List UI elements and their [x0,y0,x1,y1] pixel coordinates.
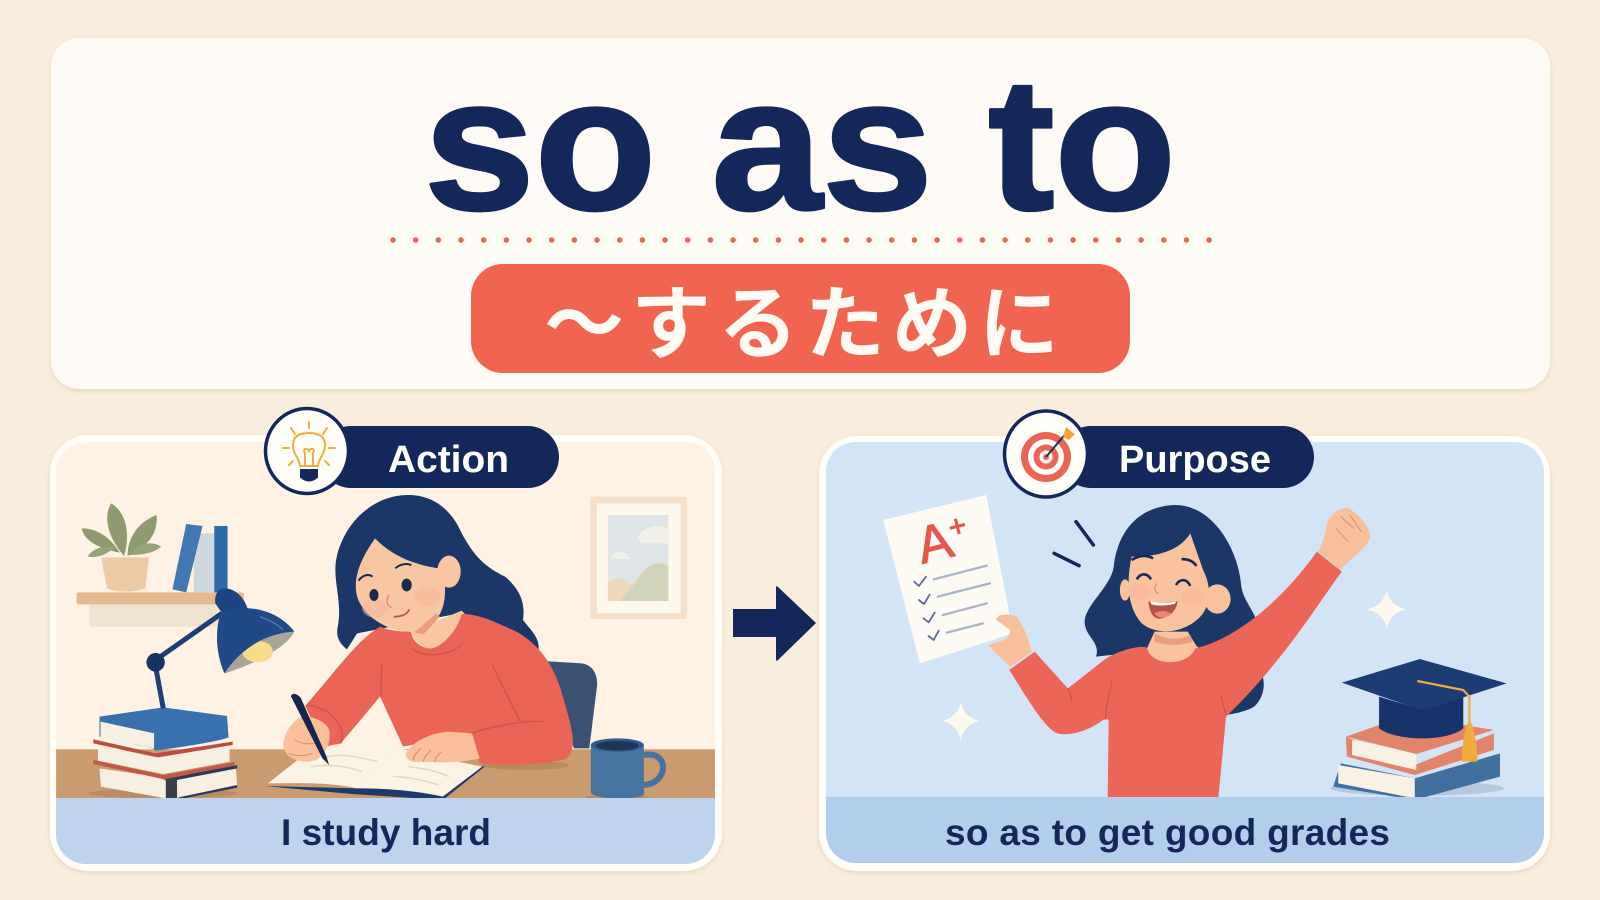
desk shadow [482,762,569,770]
open book [264,743,485,800]
icon: target [1021,427,1075,482]
purpose card frame [819,436,1550,871]
purpose badge [1004,411,1314,497]
writing hand and pen [283,694,330,765]
panel: title card [51,38,1550,389]
chair [543,661,597,748]
shelf [77,592,244,627]
lamp [146,588,294,708]
desk book stack [89,707,237,799]
purpose badge: Purpose [1119,439,1271,481]
person cheering [1009,505,1370,798]
grade mark: + [945,509,970,545]
motion lines [1054,522,1093,566]
person studying [305,495,573,765]
action badge: Action [388,439,509,481]
resting hand [406,732,480,762]
action caption band [56,798,715,864]
title: so as to [424,39,1176,249]
dotted divider [393,237,1211,243]
action card frame [50,435,722,871]
purpose caption band [826,797,1544,863]
plant [82,503,161,592]
sparkles [942,589,1406,741]
action scene [56,442,719,864]
hand holding paper [988,614,1032,667]
panel: action [50,408,722,871]
purpose caption: so as to get good grades [945,812,1390,853]
wall picture [590,497,687,619]
graduation cap and books [1331,659,1507,800]
action caption: I study hard [281,812,491,853]
action badge [266,408,559,494]
shelf books [172,524,228,592]
panel: purpose [819,411,1550,871]
grade mark: A [911,511,959,576]
icon: light bulb [283,422,335,480]
desk [56,749,719,803]
arrow [733,586,816,661]
mug [586,738,663,800]
meaning pill: ～するために [544,260,1066,376]
graded paper [883,495,1013,663]
purpose scene [826,442,1544,863]
